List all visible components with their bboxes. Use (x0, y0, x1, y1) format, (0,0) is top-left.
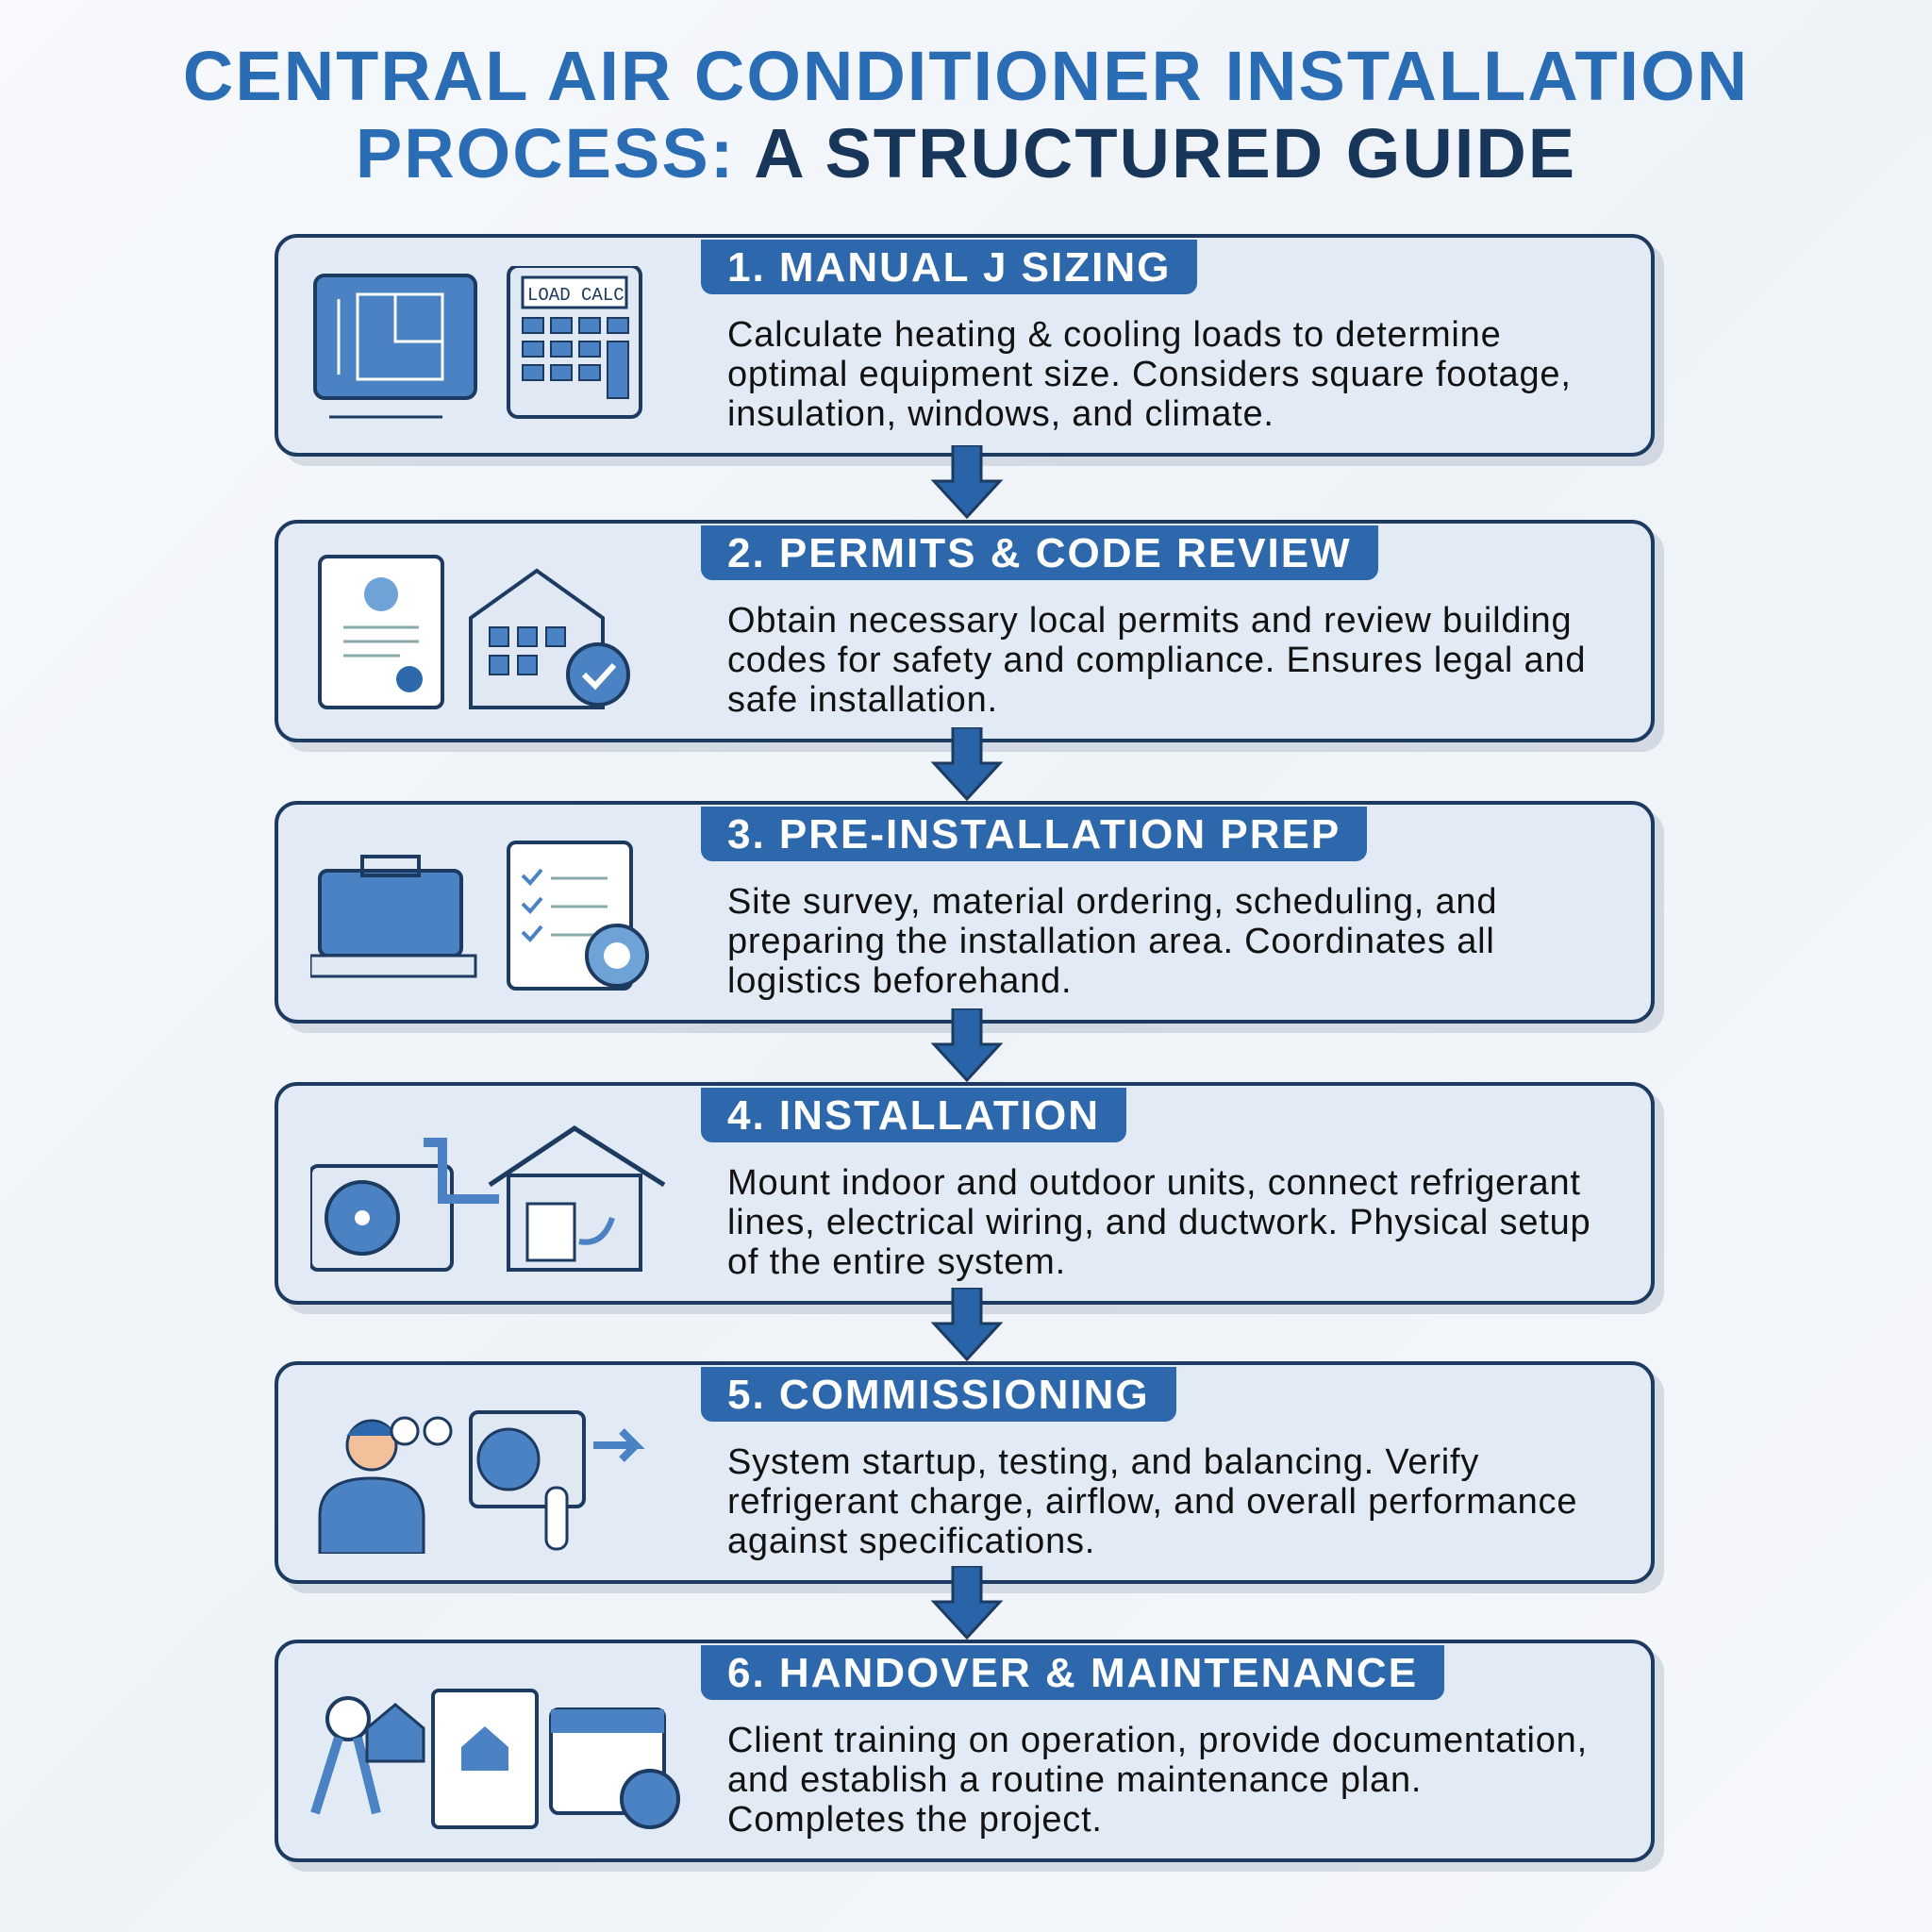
description: System startup, testing, and balancing. Verify (727, 1442, 1479, 1482)
icon: outdoor unit and house (310, 1125, 666, 1272)
description (727, 315, 1572, 434)
description (727, 1442, 1577, 1561)
description (727, 601, 1586, 720)
icon: permit and building (318, 555, 630, 709)
title: CENTRAL AIR CONDITIONER INSTALLATION (183, 37, 1749, 115)
description: against specifications. (727, 1522, 1095, 1561)
description: Site survey, material ordering, scheduling, and (727, 882, 1497, 922)
arrow (930, 445, 1004, 519)
description (727, 882, 1497, 1001)
panel: commissioning (275, 1361, 1655, 1584)
icon: blueprint and calculator (313, 266, 642, 419)
description: Obtain necessary local permits and review building (727, 601, 1572, 641)
panel: pre-installation prep (275, 801, 1655, 1024)
heading: 3. PRE-INSTALLATION PREP (727, 811, 1341, 858)
description: safe installation. (727, 680, 998, 720)
description: and establish a routine maintenance plan. (727, 1760, 1422, 1800)
description: codes for safety and compliance. Ensures legal and (727, 641, 1586, 680)
icon: technician with gauges (319, 1410, 645, 1554)
icon: toolbox and checklist (310, 841, 649, 991)
heading: 6. HANDOVER & MAINTENANCE (727, 1650, 1418, 1696)
description: optimal equipment size. Considers square footage, (727, 355, 1572, 394)
description: insulation, windows, and climate. (727, 394, 1274, 434)
description: logistics beforehand. (727, 961, 1072, 1001)
panel: manual j sizing (275, 234, 1655, 457)
arrow (930, 1566, 1004, 1640)
icon: keys, manual, calendar (310, 1689, 680, 1829)
arrow (930, 1288, 1004, 1361)
icon: blueprint and calculator: LOAD CALC (527, 285, 625, 306)
panel: installation (275, 1082, 1655, 1305)
title: PROCESS: A STRUCTURED GUIDE (356, 114, 1576, 192)
description: Mount indoor and outdoor units, connect refrigerant (727, 1163, 1581, 1203)
title (183, 37, 1749, 192)
description: preparing the installation area. Coordinates all (727, 922, 1495, 961)
panel: permits (275, 520, 1655, 742)
heading: 4. INSTALLATION (727, 1092, 1100, 1139)
arrow (930, 1008, 1004, 1082)
description (727, 1163, 1591, 1282)
description: Completes the project. (727, 1800, 1103, 1840)
description: Calculate heating & cooling loads to determine (727, 315, 1502, 355)
heading: 2. PERMITS & CODE REVIEW (727, 530, 1352, 576)
description (727, 1721, 1588, 1840)
description: lines, electrical wiring, and ductwork. Physical setup (727, 1203, 1591, 1242)
panel: handover (275, 1640, 1655, 1862)
arrow (930, 727, 1004, 801)
heading: 5. COMMISSIONING (727, 1372, 1150, 1418)
description: refrigerant charge, airflow, and overall performance (727, 1482, 1577, 1522)
description: of the entire system. (727, 1242, 1066, 1282)
description: Client training on operation, provide documentation, (727, 1721, 1588, 1760)
heading: 1. MANUAL J SIZING (727, 244, 1171, 291)
